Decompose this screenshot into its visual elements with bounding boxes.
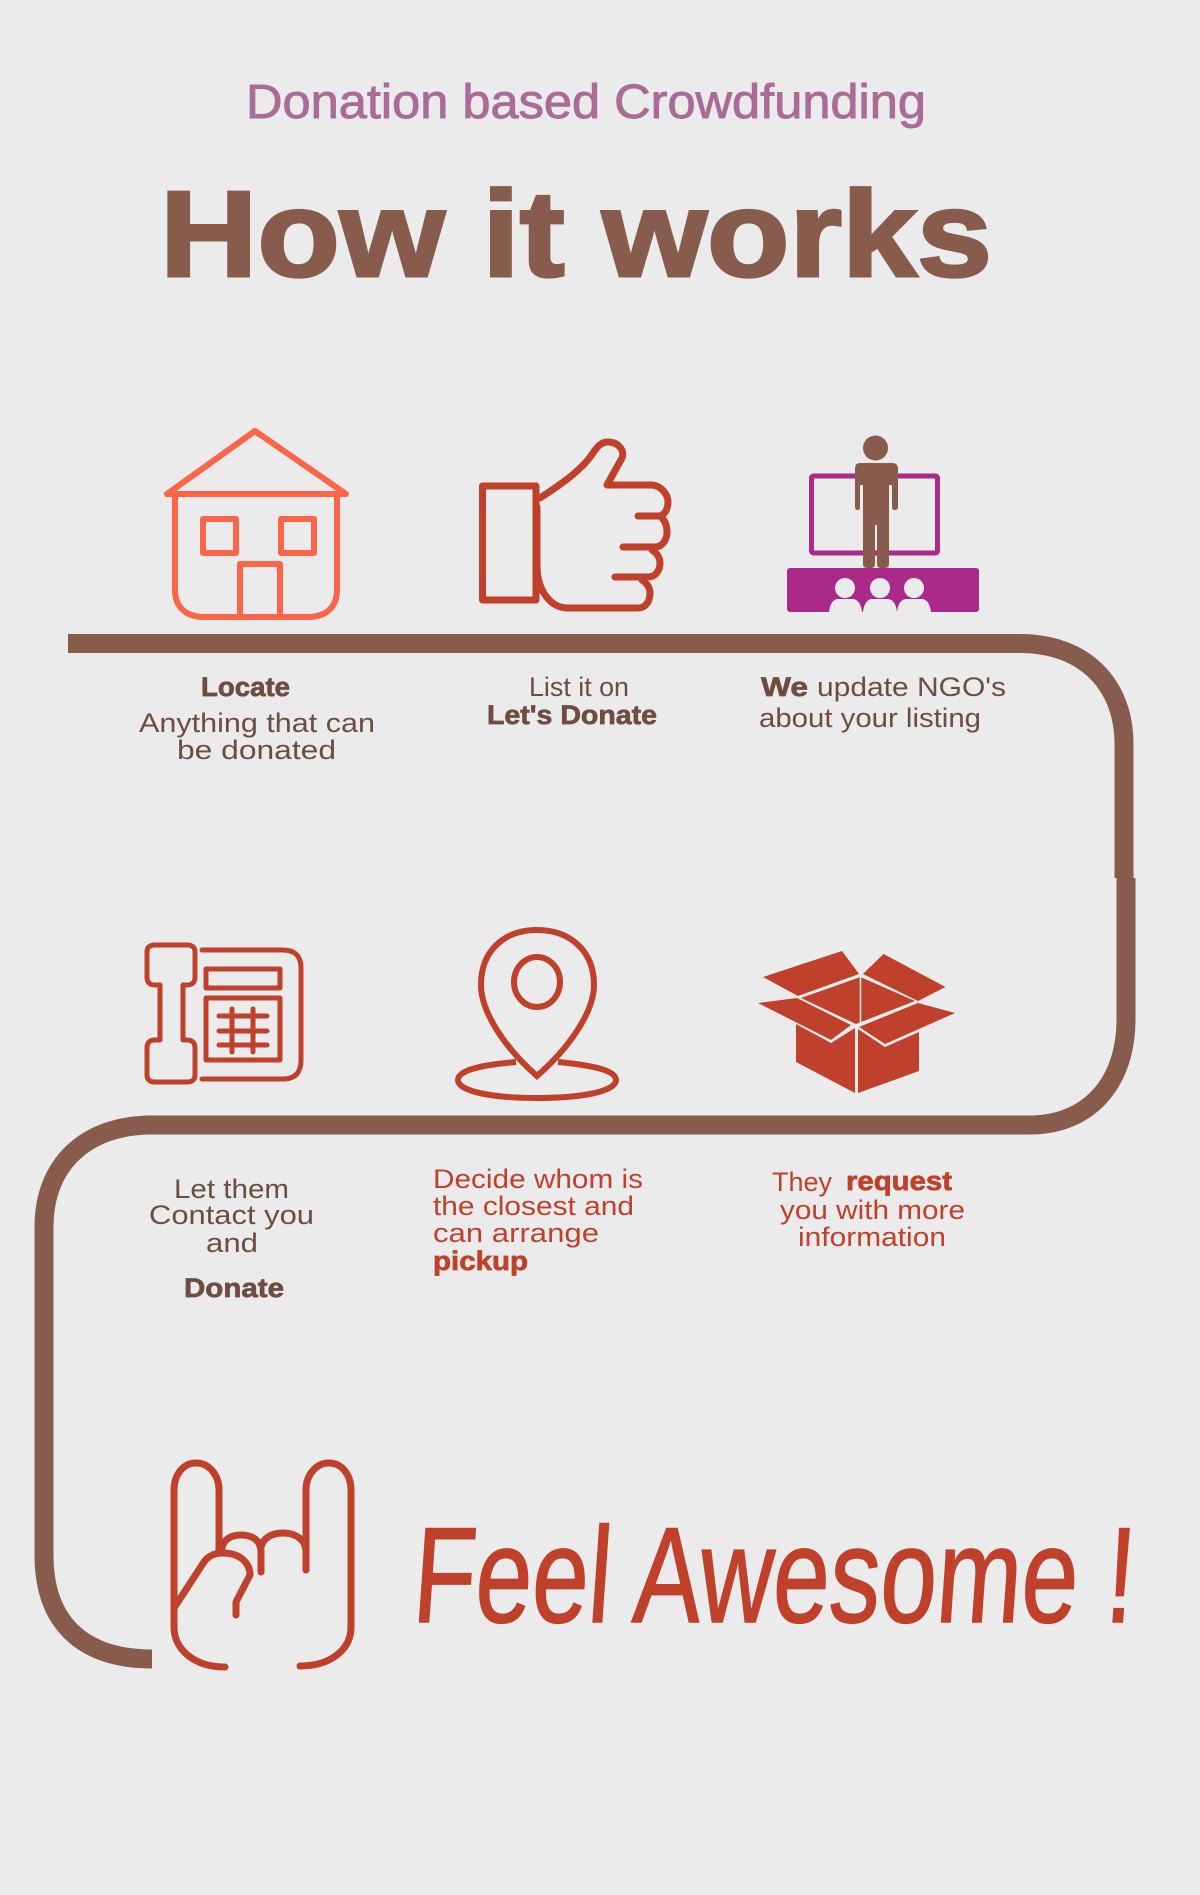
platform bbox=[787, 568, 979, 612]
label: we update: We bbox=[761, 672, 808, 702]
label: decide: the closest and bbox=[433, 1191, 634, 1221]
label: request: you with more bbox=[780, 1195, 965, 1225]
label: decide: can arrange bbox=[433, 1218, 599, 1248]
timeline path bbox=[44, 644, 1126, 1659]
person bbox=[855, 436, 898, 568]
icon: rock hand bbox=[174, 1463, 351, 1667]
label: locate: be donated bbox=[177, 735, 336, 765]
label: list it: List it on bbox=[529, 672, 629, 702]
presentation board bbox=[812, 476, 938, 553]
label: request bbox=[772, 1166, 965, 1252]
icon: person presenting to audience bbox=[787, 436, 979, 612]
icon: thumbs up bbox=[482, 442, 668, 608]
label: decide: Decide whom is bbox=[433, 1164, 643, 1194]
title: How it works bbox=[160, 166, 992, 302]
label: request: information bbox=[798, 1222, 946, 1252]
label: list it bbox=[487, 672, 657, 730]
label: decide bbox=[433, 1164, 643, 1276]
icon: house bbox=[167, 431, 346, 617]
subtitle: Donation based Crowdfunding bbox=[246, 76, 926, 129]
label: contact: Let them bbox=[174, 1174, 289, 1204]
label: locate: Locate bbox=[201, 672, 290, 702]
icon: map pin bbox=[458, 930, 616, 1098]
label: contact: Contact you bbox=[149, 1200, 314, 1230]
label: locate: Anything that can bbox=[139, 708, 375, 738]
label: we update: about your listing bbox=[759, 703, 981, 733]
label: locate bbox=[139, 672, 375, 765]
label: contact bbox=[149, 1174, 314, 1303]
audience bbox=[829, 578, 931, 612]
label: decide: pickup bbox=[433, 1246, 528, 1276]
label: request: They bbox=[772, 1167, 832, 1197]
label: we update bbox=[759, 672, 1006, 733]
label: request: request bbox=[846, 1166, 952, 1196]
icon: telephone bbox=[147, 945, 301, 1082]
icon: open box bbox=[758, 951, 955, 1093]
label: contact: and bbox=[206, 1228, 258, 1258]
label: list it: Let's Donate bbox=[487, 700, 657, 730]
label: contact: Donate bbox=[184, 1273, 284, 1303]
label: we update: update NGO's bbox=[817, 672, 1006, 702]
